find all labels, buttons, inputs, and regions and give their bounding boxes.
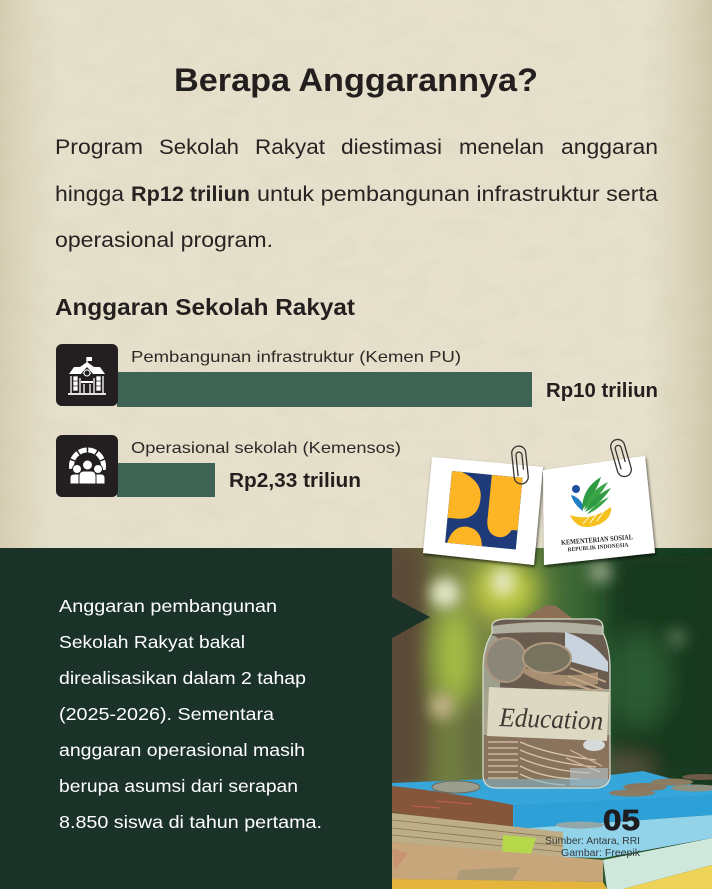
bar: operations (117, 463, 215, 497)
intro paragraph: Rp12 triliun (131, 183, 250, 206)
intro paragraph: menelan (459, 136, 544, 159)
intro paragraph: Rakyat (255, 136, 325, 159)
panel body text: 8.850 siswa di tahun pertama. (59, 812, 322, 832)
card: Kemensos logo (543, 456, 655, 565)
value: operations: Rp2,33 triliun (229, 470, 361, 492)
chart heading: Anggaran Sekolah Rakyat (55, 294, 355, 320)
panel body text: Sekolah Rakyat bakal (59, 632, 245, 652)
arrow notch (392, 597, 430, 638)
logo wordmark (561, 533, 634, 554)
page number: 05 (603, 805, 640, 837)
bar: infrastructure (117, 372, 532, 407)
jar label (487, 687, 609, 741)
jar label: Education (498, 702, 604, 736)
glass jar (483, 605, 610, 790)
intro paragraph: anggaran (561, 136, 658, 159)
panel body text: berupa asumsi dari serapan (59, 776, 298, 796)
icon: paperclip right (609, 438, 633, 478)
intro paragraph (55, 136, 658, 252)
panel body text: Anggaran pembangunan (59, 596, 277, 616)
logo wordmark: KEMENTERIAN SOSIAL (561, 533, 633, 547)
panel body text (59, 596, 322, 832)
label: operations: Operasional sekolah (Kemensos) (131, 440, 401, 457)
bar chart: budget (56, 344, 658, 497)
logo wordmark: REPUBLIK INDONESIA (567, 542, 630, 553)
blurred foliage (385, 540, 712, 790)
icon: paperclip left (511, 445, 529, 485)
logo: Kementerian Sosial (561, 477, 634, 554)
photo: coin jar on books (385, 540, 712, 889)
paper background (0, 0, 712, 560)
source credits (545, 835, 641, 859)
panel: dark green text panel (0, 548, 393, 889)
book stack (392, 771, 712, 889)
panel body text: anggaran operasional masih (59, 740, 305, 760)
intro paragraph: Sekolah (159, 136, 239, 159)
intro paragraph: operasional program. (55, 229, 273, 252)
intro paragraph: hingga (55, 183, 124, 206)
logo: Kementerian PU (445, 471, 523, 549)
source credits: Gambar: Freepik (561, 847, 641, 859)
source credits: Sumber: Antara, RRI (545, 835, 640, 847)
icon: school building (56, 344, 118, 406)
bar row: infrastructure (56, 344, 658, 407)
label: infrastructure: Pembangunan infrastruktur (Kemen PU) (131, 349, 461, 366)
panel body text: direalisasikan dalam 2 tahap (59, 668, 306, 688)
title: Berapa Anggarannya? (174, 62, 538, 98)
bar row: operations (56, 435, 401, 497)
intro paragraph: untuk pembangunan infrastruktur serta (257, 183, 658, 206)
card: PU logo (423, 457, 543, 565)
icon: gear and people (56, 435, 118, 497)
intro paragraph: Program (55, 136, 143, 159)
panel body text: (2025-2026). Sementara (59, 704, 274, 724)
intro paragraph: diestimasi (341, 136, 442, 159)
value: infrastructure: Rp10 triliun (546, 380, 658, 402)
